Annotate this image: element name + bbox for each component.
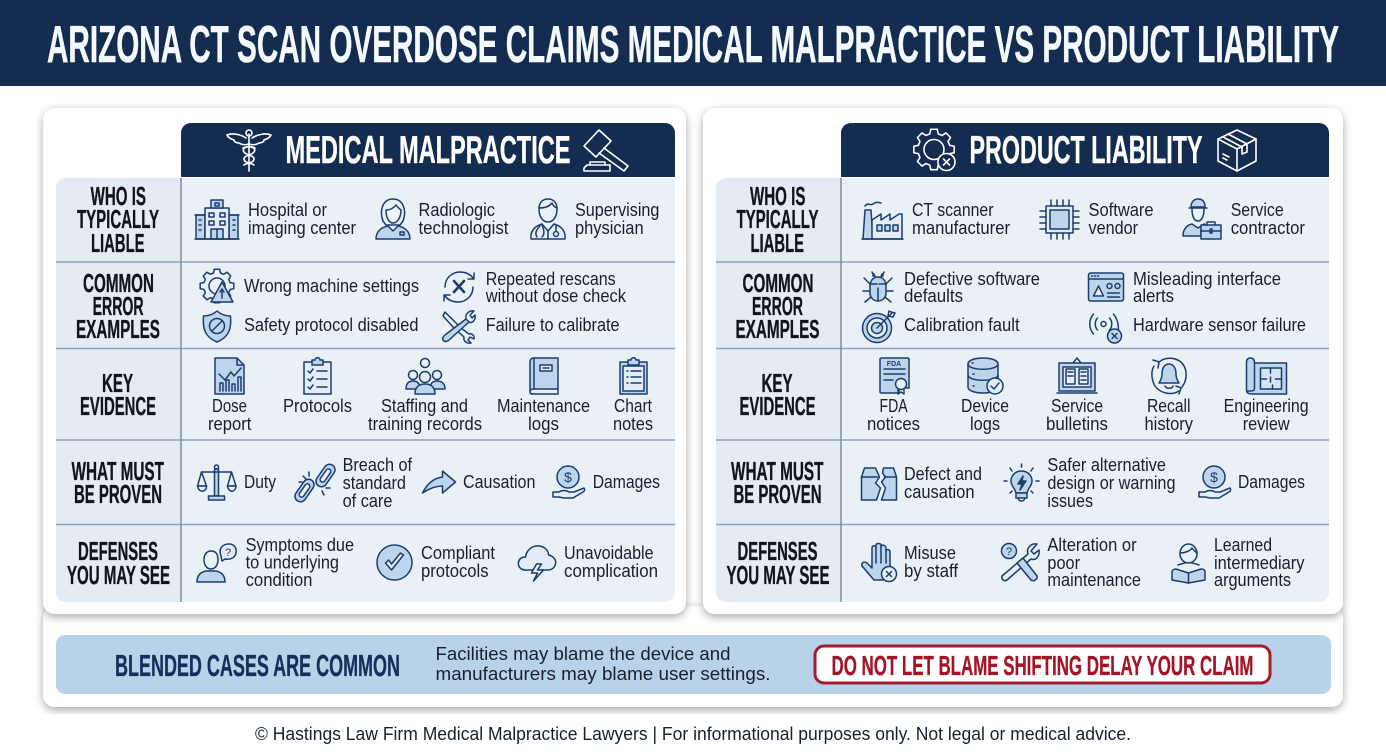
item: compliant protocols: protocols <box>421 561 489 581</box>
icon: woman technologist <box>376 199 410 239</box>
item: wrong machine settings: Wrong machine settings <box>244 276 419 296</box>
row label: COMMON <box>742 268 814 298</box>
item: repeated rescans: without dose check <box>485 286 627 306</box>
row label: WHO IS <box>750 181 805 211</box>
item: engineering review: review <box>1243 414 1291 434</box>
item: service bulletins <box>1046 358 1108 434</box>
item: unavoidable complication <box>518 543 658 581</box>
row label <box>80 368 156 421</box>
icon: dose report <box>215 358 244 394</box>
item: dose report <box>208 358 251 434</box>
item: ct scanner manufacturer: manufacturer <box>912 218 1010 238</box>
item: fda notices: notices <box>867 414 920 434</box>
icon: person with question <box>197 544 236 582</box>
item: defective software defaults: defaults <box>904 286 963 306</box>
item: calibration fault: Calibration fault <box>904 315 1020 335</box>
icon: staff group <box>406 358 445 394</box>
item: hardware sensor failure: Hardware sensor failure <box>1133 315 1306 335</box>
item: alteration or poor maintenance: poor <box>1047 553 1080 573</box>
icon: microchip <box>1040 200 1079 239</box>
row label: ERROR <box>93 291 144 321</box>
item: hospital <box>195 200 356 239</box>
panel: product liability <box>703 108 1343 614</box>
row label: WHO IS <box>91 181 146 211</box>
row label <box>740 368 816 421</box>
item: service bulletins: bulletins <box>1046 414 1108 434</box>
item: safety protocol disabled <box>203 311 418 342</box>
row: who is typically liable <box>77 181 659 258</box>
item: staffing and training records: Staffing and <box>381 396 468 416</box>
item: learned intermediary arguments <box>1172 535 1304 590</box>
row label: BE PROVEN <box>734 479 822 509</box>
item: fda notices <box>867 358 920 434</box>
item: software vendor: vendor <box>1088 218 1138 238</box>
icon: hand with coin: $ <box>564 469 572 485</box>
icon: bulletin board <box>1057 358 1097 393</box>
item: chart notes <box>613 358 653 434</box>
item: breach of standard of care: standard <box>343 473 406 493</box>
item: compliant protocols <box>377 543 495 581</box>
item: learned intermediary arguments: arguments <box>1214 570 1291 590</box>
icon: rescan arrows <box>444 272 474 302</box>
blended cases banner <box>56 635 1331 694</box>
icon: scales of justice <box>198 465 236 500</box>
row: key evidence <box>740 358 1309 434</box>
icon: hospital <box>195 200 239 239</box>
item: protocols <box>283 358 352 416</box>
item: defective software defaults: Defective software <box>904 269 1040 289</box>
item: maintenance logs: logs <box>528 414 559 434</box>
item: defect and causation: Defect and <box>904 464 982 484</box>
item: misleading interface alerts <box>1088 269 1281 306</box>
item: engineering review: Engineering <box>1224 396 1309 416</box>
item: safer alternative design: Safer alternative <box>1047 455 1166 475</box>
icon: gear with x <box>914 129 955 170</box>
icon: light bulb <box>1004 464 1039 501</box>
item: maintenance logs <box>497 358 590 434</box>
item: protocols: Protocols <box>283 396 352 416</box>
item: staffing and training records: training records <box>368 414 482 434</box>
item: engineering review <box>1224 358 1309 434</box>
item: symptoms due to underlying condition: Symptoms due <box>246 535 354 555</box>
row label: TYPICALLY <box>77 204 159 234</box>
item: safer alternative design <box>1004 455 1176 511</box>
item: recall history: Recall <box>1147 396 1190 416</box>
icon: caduceus <box>227 130 271 171</box>
item: symptoms due to underlying condition: condition <box>246 570 312 590</box>
banner description: manufacturers may blame user settings. <box>436 664 770 684</box>
icon: database check <box>968 358 1003 394</box>
row: common error examples <box>76 268 627 344</box>
item: causation: Causation <box>463 472 535 492</box>
item: alteration or poor maintenance: Alteration or <box>1047 535 1137 555</box>
item: radiologic technologist: technologist <box>418 218 508 238</box>
item: ct scanner manufacturer: CT scanner <box>912 200 994 220</box>
icon: bell with arrows <box>1152 358 1186 394</box>
item: service contractor <box>1183 199 1305 239</box>
icon: sensor signal <box>1090 314 1122 343</box>
icon: clipboard checklist <box>304 358 331 394</box>
banner description: Facilities may blame the device and <box>436 644 730 664</box>
item: device logs: Device <box>961 396 1009 416</box>
item: hardware sensor failure <box>1090 314 1306 343</box>
item: device logs: logs <box>970 414 1000 434</box>
bottom card <box>43 606 1343 707</box>
callout: do not let blame shifting delay <box>815 646 1270 683</box>
row: defenses you may see <box>67 535 658 590</box>
icon: storm cloud <box>518 546 556 581</box>
row: common error examples <box>736 268 1306 344</box>
item: calibration fault <box>862 311 1020 342</box>
icon: wrench with question: ? <box>1006 546 1012 558</box>
item: dose report: report <box>208 414 251 434</box>
item: ct scanner manufacturer <box>862 200 1010 239</box>
row label <box>77 181 159 258</box>
row label <box>67 536 170 590</box>
item: radiologic technologist <box>376 199 508 239</box>
item: compliant protocols: Compliant <box>421 543 495 563</box>
item: symptoms due to underlying condition <box>197 535 354 590</box>
item: dose report: Dose <box>212 396 247 416</box>
item: chart notes: notes <box>613 414 653 434</box>
item: recall history <box>1144 358 1193 434</box>
row label: BE PROVEN <box>74 479 162 509</box>
item: failure to calibrate <box>443 311 620 343</box>
item: defect and causation: causation <box>904 482 974 502</box>
row label: LIABLE <box>91 228 144 258</box>
item: alteration or poor maintenance: maintenance <box>1047 570 1141 590</box>
icon: worker with toolbox <box>1183 199 1221 239</box>
item: software vendor <box>1040 200 1154 239</box>
item: service contractor: Service <box>1231 200 1284 220</box>
item: symptoms due to underlying condition: to underlying <box>246 552 339 572</box>
item: wrong machine settings <box>200 269 419 303</box>
icon: blueprint <box>1246 358 1286 394</box>
column heading <box>841 123 1329 177</box>
column heading <box>181 123 675 177</box>
item: unavoidable complication: Unavoidable <box>564 543 654 563</box>
banner heading: BLENDED CASES ARE COMMON <box>115 648 400 683</box>
icon: curved arrow <box>422 471 456 493</box>
item: radiologic technologist: Radiologic <box>418 200 495 220</box>
icon: logbook <box>530 358 558 394</box>
row label: YOU MAY SEE <box>726 560 830 590</box>
item: hospital: Hospital or <box>248 200 327 220</box>
item: safer alternative design: design or warning <box>1047 473 1176 493</box>
item: hospital: imaging center <box>248 218 356 238</box>
row label: KEY <box>762 368 792 398</box>
row label: WHAT MUST <box>72 456 164 486</box>
item: misleading interface alerts: Misleading interface <box>1133 269 1281 289</box>
item: service contractor: contractor <box>1231 218 1305 238</box>
item: supervising physician <box>531 199 659 239</box>
item: recall history: history <box>1144 414 1193 434</box>
row label <box>736 268 820 344</box>
icon: target <box>862 311 895 342</box>
item: repeated rescans: Repeated rescans <box>486 269 616 289</box>
icon: gavel <box>584 130 628 171</box>
icon: factory <box>862 202 903 239</box>
item: defective software defaults <box>863 269 1040 306</box>
footer disclaimer: © Hastings Law Firm Medical Malpractice Lawyers | For informational purposes only. Not legal or medical advice. <box>255 724 1131 744</box>
row label: DEFENSES <box>78 536 158 566</box>
icon: wrench and screwdriver <box>443 311 475 343</box>
item: misuse by staff <box>862 543 959 582</box>
item: misuse by staff: Misuse <box>904 543 956 563</box>
row label: KEY <box>102 368 133 398</box>
item: damages <box>1199 466 1305 498</box>
row: key evidence <box>80 358 653 434</box>
icon: stop hand <box>862 544 896 582</box>
item: learned intermediary arguments: intermediary <box>1214 553 1304 573</box>
icon: physician <box>531 199 565 239</box>
icon: check circle <box>377 545 412 580</box>
icon: interface window <box>1088 273 1124 301</box>
row label: WHAT MUST <box>731 456 824 486</box>
item: supervising physician: Supervising <box>575 200 659 220</box>
column heading: MEDICAL MALPRACTICE <box>286 129 570 172</box>
row: what must be proven <box>72 455 660 511</box>
icon: person with question: ? <box>225 547 231 559</box>
row label <box>731 456 824 509</box>
item: causation <box>422 471 535 493</box>
item: damages: Damages <box>593 472 660 492</box>
row: defenses you may see <box>726 535 1304 590</box>
row label: ERROR <box>752 291 803 321</box>
row label <box>736 181 818 258</box>
item: safety protocol disabled: Safety protocol disabled <box>244 315 418 335</box>
title banner <box>0 0 1386 86</box>
icon: hand with coin: $ <box>1210 469 1218 485</box>
row: who is typically liable <box>736 181 1305 258</box>
item: unavoidable complication: complication <box>564 561 658 581</box>
row label: EXAMPLES <box>76 314 160 344</box>
row label: LIABLE <box>750 228 804 258</box>
row label: TYPICALLY <box>736 204 818 234</box>
item: misuse by staff: by staff <box>904 561 959 581</box>
item: duty: Duty <box>244 472 276 492</box>
icon: clipboard notes <box>620 358 647 394</box>
item: device logs <box>961 358 1009 434</box>
item: defect and causation <box>862 464 982 502</box>
item: maintenance logs: Maintenance <box>497 396 590 416</box>
item: damages <box>553 466 660 498</box>
panel: medical malpractice <box>43 108 686 614</box>
item: learned intermediary arguments: Learned <box>1214 535 1272 555</box>
item: supervising physician: physician <box>575 218 644 238</box>
item: chart notes: Chart <box>614 396 652 416</box>
banner description <box>436 644 770 684</box>
row label <box>72 456 164 509</box>
item: service bulletins: Service <box>1051 396 1103 416</box>
row label: EVIDENCE <box>740 391 816 421</box>
row: what must be proven <box>731 455 1305 511</box>
column heading: PRODUCT LIABILITY <box>970 129 1202 172</box>
row label: DEFENSES <box>738 536 818 566</box>
item: breach of standard of care: Breach of <box>343 455 413 475</box>
row label: COMMON <box>83 268 154 298</box>
item: staffing and training records <box>368 358 482 434</box>
icon: cracked box <box>862 468 896 500</box>
icon: package box <box>1218 130 1256 171</box>
item: misleading interface alerts: alerts <box>1133 286 1174 306</box>
icon: bug <box>863 272 893 302</box>
icon: gear warning <box>200 269 234 303</box>
row label: EXAMPLES <box>736 314 820 344</box>
row label: YOU MAY SEE <box>67 560 170 590</box>
item: alteration or poor maintenance <box>1002 535 1141 590</box>
item: fda notices: FDA <box>880 396 908 416</box>
item: safer alternative design: issues <box>1047 491 1093 511</box>
row label: EVIDENCE <box>80 391 156 421</box>
item: damages: Damages <box>1238 472 1305 492</box>
item: repeated rescans <box>444 269 627 306</box>
item: duty <box>198 465 276 500</box>
item: breach of standard of care: of care <box>343 491 392 511</box>
item: software vendor: Software <box>1088 200 1154 220</box>
item: breach of standard of care <box>293 455 413 511</box>
row label <box>726 536 830 590</box>
icon: person reading <box>1172 544 1205 583</box>
icon: fda certificate: FDA <box>887 361 901 368</box>
icon: broken chain <box>293 462 337 504</box>
icon: shield <box>203 311 231 342</box>
item: failure to calibrate: Failure to calibrate <box>486 315 620 335</box>
row label <box>76 268 160 344</box>
